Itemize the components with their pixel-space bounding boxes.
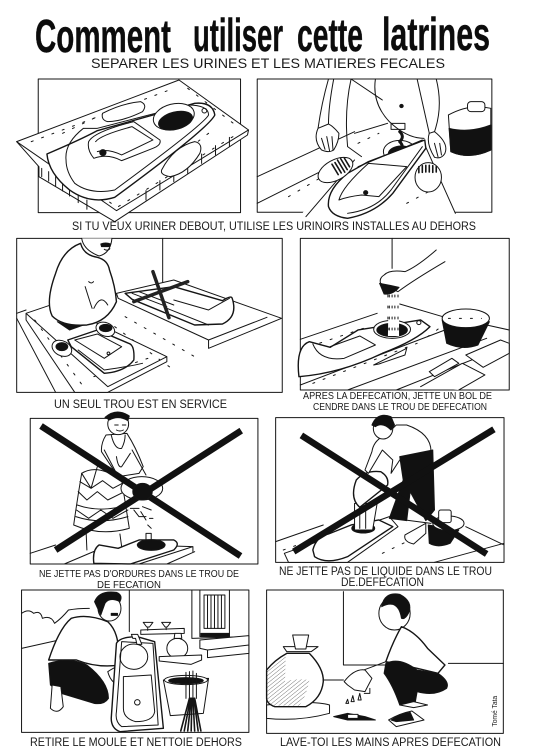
red cross: [41, 426, 241, 556]
icon: hole: [352, 524, 375, 533]
caption: DE FECATION: [97, 579, 161, 591]
back slab: [116, 280, 282, 348]
title: Comment: [35, 10, 171, 62]
poured water: [355, 503, 377, 530]
cross: [294, 429, 494, 554]
caption: [303, 390, 492, 413]
caption: LAVE-TOI LES MAINS APRES DEFECATION: [280, 737, 501, 749]
woman: [74, 412, 146, 550]
bucket and broom: [163, 671, 209, 731]
panel: latrine slab: [17, 79, 249, 222]
footrest: [161, 142, 201, 177]
caption: RETIRE LE MOULE ET NETTOIE DEHORS: [30, 737, 242, 749]
man squatting: [344, 594, 447, 727]
bucket: [428, 510, 464, 546]
removed mould: [111, 634, 163, 732]
man: [365, 415, 435, 544]
icon: hole: [137, 540, 165, 550]
caption: APRES LA DEFECATION, JETTE UN BOL DE: [303, 390, 492, 402]
back mould: [125, 287, 234, 325]
door and steps: [192, 590, 249, 658]
jar: [354, 471, 388, 507]
subtitle: SEPARER LES URINES ET LES MATIERES FECALES: [91, 56, 445, 71]
icon: black pot: [442, 309, 489, 347]
icon: hole: [377, 323, 407, 337]
hand and arm with bowl: [380, 250, 445, 294]
figure: legs and belly: [316, 79, 446, 158]
icon: hole with stool: [383, 132, 416, 163]
signature: Tomé Tata: [492, 696, 499, 727]
second mould: [421, 340, 509, 390]
water drops and puddle: [334, 688, 375, 720]
front slab: [26, 303, 167, 392]
panel: pouring ash: [298, 238, 509, 390]
panel: no garbage: [30, 412, 258, 564]
caption: NE JETTE PAS D'ORDURES DANS LE TROU DE: [39, 568, 239, 580]
icon: drain hole: [150, 99, 197, 134]
jug on stand: [159, 633, 202, 664]
panel: cleaning the mould: [22, 590, 249, 732]
urinal mould: [328, 140, 426, 218]
water jar: [267, 635, 330, 719]
title: latrines: [382, 8, 490, 60]
seated man: [49, 243, 116, 325]
ash stream: [388, 293, 399, 336]
panel: no liquid: [276, 415, 504, 562]
caption: [279, 566, 492, 589]
left sandal: [314, 152, 357, 188]
title: cette: [297, 9, 363, 61]
caption: [39, 568, 239, 591]
head: [82, 238, 112, 256]
caption: NE JETTE PAS DE LIQUIDE DANS LE TROU: [279, 566, 492, 578]
icon: black pot: [448, 102, 491, 155]
panel: one hole in service: [17, 238, 282, 392]
title: [35, 8, 490, 62]
sandals and shadow: [49, 319, 117, 360]
front mould: [68, 330, 134, 373]
caption: SI TU VEUX URINER DEBOUT, UTILISE LES URINOIRS INSTALLES AU DEHORS: [72, 221, 476, 233]
panel: washing hands: [267, 590, 503, 733]
caption: CENDRE DANS LE TROU DE DEFECATION: [313, 401, 487, 413]
footrest: [102, 102, 145, 122]
title: utiliser: [193, 9, 283, 61]
panel: man urinating: [257, 79, 492, 218]
shelf with cups: [141, 622, 184, 634]
man washing: [49, 592, 137, 711]
slab and mould: [284, 517, 398, 562]
cross mark: [134, 272, 188, 318]
slab and mould: [94, 540, 177, 564]
urinal mould: [298, 320, 430, 377]
right sandal: [415, 163, 441, 192]
caption: UN SEUL TROU EST EN SERVICE: [54, 399, 227, 411]
caption: DE.DEFECATION: [341, 577, 424, 589]
rubbish falling from bowl: [121, 477, 163, 540]
